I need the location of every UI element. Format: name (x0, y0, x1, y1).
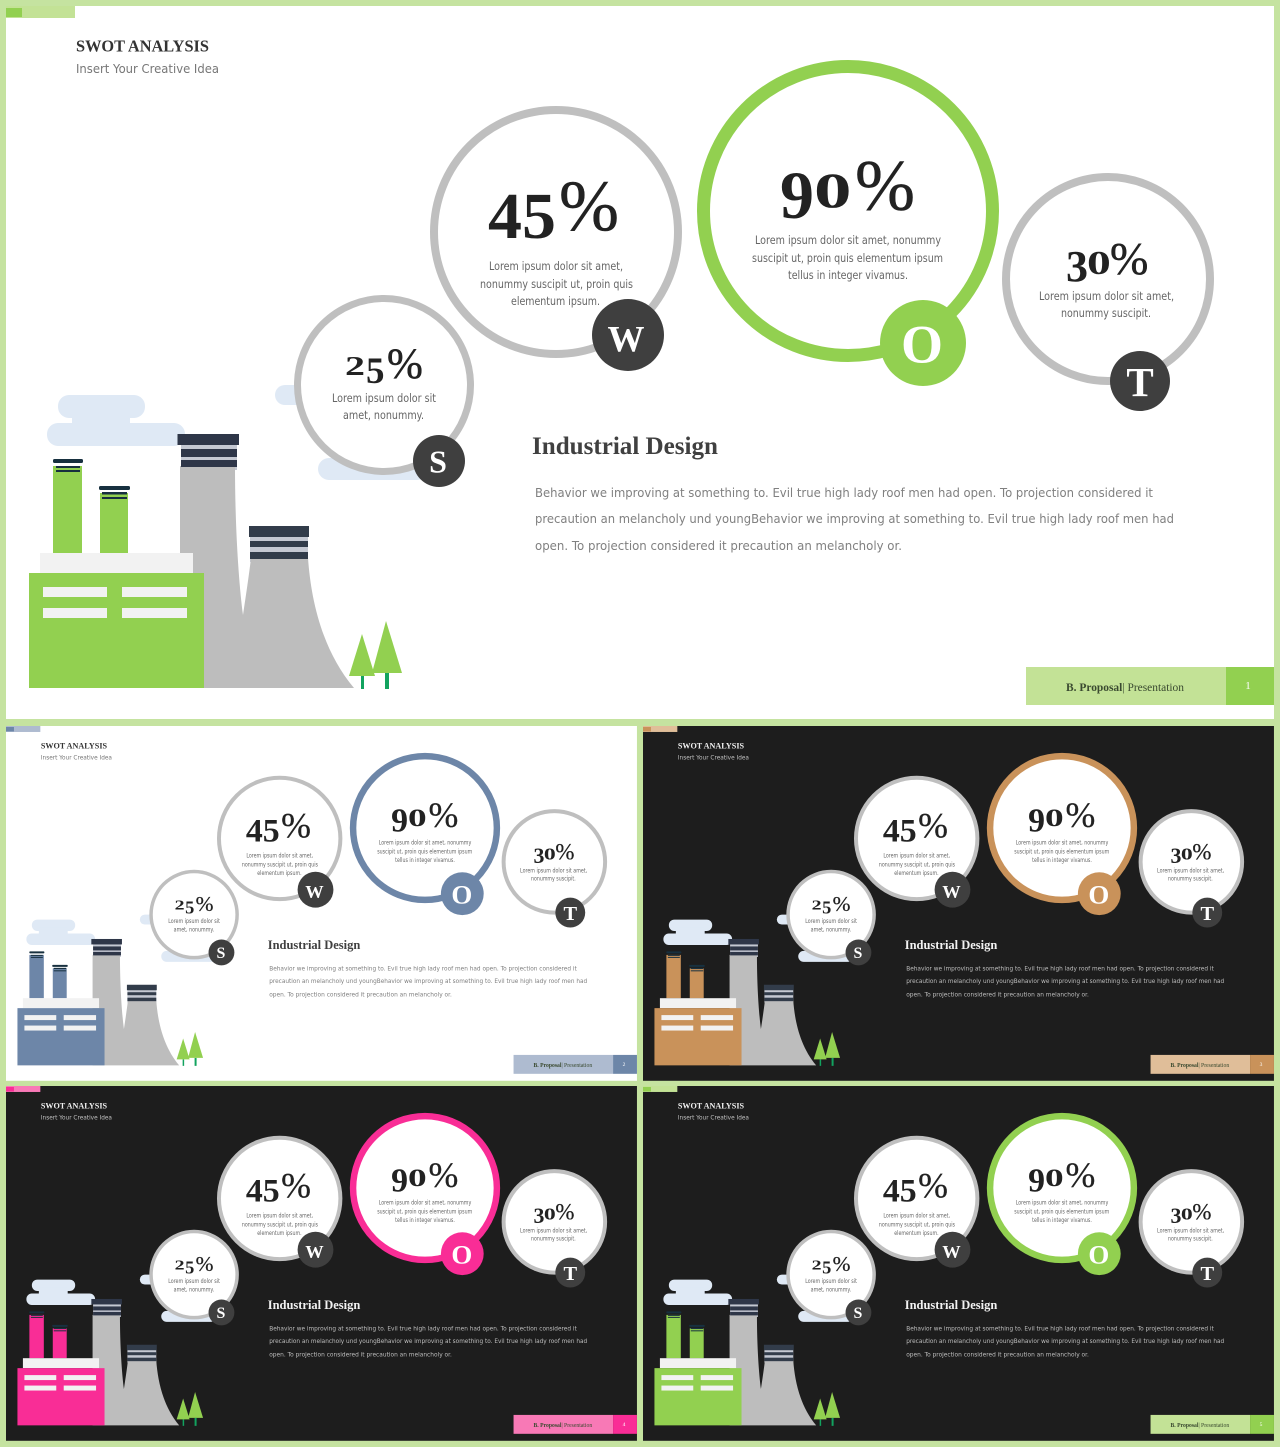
body text (906, 965, 1224, 999)
circle W: 45%: 5 (900, 813, 917, 849)
circle O: 90%: % (855, 146, 915, 226)
circle W: 45%: % (281, 805, 311, 845)
circle S: 25%: S (854, 1305, 863, 1322)
circle S: 25%: 2 (175, 898, 185, 913)
circle T: 30%: 3 (533, 1203, 544, 1228)
circle W: 45%: % (559, 166, 619, 246)
body text: open. To projection considered it precaution an melancholy or. (269, 992, 452, 999)
circle T: 30%: 3 (1170, 843, 1181, 868)
title: SWOT ANALYSIS (41, 741, 107, 751)
circle T: 30%: nonummy suscipit. (1168, 877, 1213, 883)
body text: precaution an melancholy und youngBehavior we improving at something to. Evil true high lady roof men had (269, 1338, 587, 1345)
circle T: 30%: % (555, 839, 574, 864)
top tab (643, 726, 677, 732)
circle O: 90% (353, 756, 497, 915)
circle S: 25%: S (217, 1305, 226, 1322)
circle S: 25%: 5 (822, 1258, 831, 1278)
circle S: 25%: amet, nonummy. (174, 928, 214, 934)
circle O: 90%: O (451, 1239, 472, 1269)
circle T: 30%: 0 (1181, 845, 1193, 863)
top tab (643, 1086, 677, 1092)
circle W: 45%: W (305, 882, 324, 902)
subtitle: Insert Your Creative Idea (41, 1114, 112, 1121)
circle T: 30% (504, 811, 605, 928)
footer bar: B. Proposal| Presentation (1170, 1423, 1229, 1429)
circle O: 90%: tellus in integer vivamus. (1032, 1218, 1092, 1224)
circle O: 90%: tellus in integer vivamus. (395, 1218, 455, 1224)
circle T: 30%: % (1110, 233, 1148, 284)
circle W: 45%: elementum ipsum. (894, 871, 939, 877)
footer bar: 2 (623, 1062, 626, 1068)
circle T: 30%: 3 (1170, 1203, 1181, 1228)
circle S: 25%: Lorem ipsum dolor sit (805, 1279, 858, 1285)
heading: Industrial Design (532, 433, 718, 460)
circle W: 45%: W (608, 320, 644, 360)
footer bar (1151, 1415, 1274, 1434)
circle O: 90%: 9 (391, 802, 408, 839)
top tab (6, 726, 40, 732)
circle O: 90%: O (901, 314, 943, 374)
circle T: 30%: Lorem ipsum dolor sit amet, (520, 868, 587, 874)
circle W: 45%: elementum ipsum. (257, 871, 302, 877)
heading: Industrial Design (905, 1298, 997, 1312)
circle W: 45%: Lorem ipsum dolor sit amet, (246, 853, 313, 859)
circle S: 25%: 2 (175, 1258, 185, 1273)
circle W: 45%: Lorem ipsum dolor sit amet, (883, 853, 950, 859)
footer bar: 1 (1245, 680, 1251, 692)
circle S: 25%: % (196, 1252, 214, 1276)
circle T: 30%: 0 (1181, 1205, 1193, 1223)
circle S: 25%: 5 (185, 898, 194, 918)
footer bar (1151, 1055, 1274, 1074)
circle T: 30% (1141, 811, 1242, 928)
circle S: 25%: Lorem ipsum dolor sit (168, 1279, 221, 1285)
illustration: clouds (26, 915, 216, 962)
circle O: 90%: O (451, 879, 472, 909)
circle W: 45% (856, 1138, 977, 1268)
circle W: 45%: Lorem ipsum dolor sit amet, (246, 1213, 313, 1219)
circle S: 25% (151, 1232, 237, 1325)
body text: Behavior we improving at something to. Evil true high lady roof men had open. To projection considered it (906, 965, 1214, 972)
circle S: 25% (151, 872, 237, 965)
circle O: 90%: 9 (780, 157, 814, 233)
circle O: 90%: % (428, 795, 458, 835)
illustration: clouds (26, 1275, 216, 1322)
circle S: 25%: amet, nonummy. (343, 408, 424, 422)
circle W: 45%: % (281, 1165, 311, 1205)
body text: precaution an melancholy und youngBehavior we improving at something to. Evil true high lady roof men had (535, 511, 1174, 526)
panel: orange on dark slide (643, 726, 1274, 1081)
footer bar: 3 (1260, 1062, 1263, 1068)
circle W: 45%: 4 (883, 1173, 900, 1209)
circle O: 90%: % (428, 1155, 458, 1195)
footer bar: B. Proposal| Presentation (1066, 680, 1184, 694)
circle S: 25%: amet, nonummy. (811, 928, 851, 934)
circle T: 30%: Lorem ipsum dolor sit amet, (520, 1228, 587, 1234)
circle S: 25%: % (387, 341, 423, 388)
circle T: 30%: T (1126, 359, 1154, 405)
circle S: 25%: % (833, 892, 851, 916)
circle O: 90% (704, 66, 992, 386)
circle O: 90%: suscipit ut, proin quis elementum ipsum (752, 251, 943, 265)
title: SWOT ANALYSIS (41, 1101, 107, 1111)
circle W: 45%: W (305, 1242, 324, 1262)
circle O: 90%: tellus in integer vivamus. (788, 268, 908, 282)
top tab (6, 6, 75, 18)
body text: open. To projection considered it precaution an melancholy or. (535, 538, 902, 553)
circle T: 30%: 0 (1087, 244, 1111, 281)
circle O: 90%: 0 (1045, 1164, 1064, 1192)
circle T: 30%: T (563, 903, 577, 925)
circle S: 25%: Lorem ipsum dolor sit (168, 919, 221, 925)
subtitle: Insert Your Creative Idea (678, 754, 749, 761)
circle W: 45%: Lorem ipsum dolor sit amet, (489, 259, 623, 273)
footer bar (1026, 667, 1274, 705)
heading: Industrial Design (905, 938, 997, 952)
illustration: factory (654, 939, 840, 1066)
circle W: 45% (856, 778, 977, 908)
footer bar: B. Proposal| Presentation (533, 1063, 592, 1069)
circle O: 90%: suscipit ut, proin quis elementum ipsum (1014, 1209, 1110, 1215)
circle T: 30% (1141, 1171, 1242, 1288)
circle T: 30%: 0 (544, 845, 556, 863)
circle T: 30%: 3 (533, 843, 544, 868)
circle T: 30%: nonummy suscipit. (531, 877, 576, 883)
heading: Industrial Design (268, 1298, 360, 1312)
circle O: 90%: 0 (408, 1164, 427, 1192)
top tab (6, 1086, 40, 1092)
circle W: 45%: elementum ipsum. (511, 294, 600, 308)
panel: pink on dark slide (6, 1086, 637, 1441)
circle O: 90%: suscipit ut, proin quis elementum ipsum (377, 1209, 473, 1215)
circle W: 45%: 4 (246, 1173, 263, 1209)
footer bar: 5 (1260, 1422, 1263, 1428)
circle T: 30%: T (1200, 903, 1214, 925)
body text: Behavior we improving at something to. Evil true high lady roof men had open. To projection considered it (269, 1325, 577, 1332)
circle O: 90%: Lorem ipsum dolor sit amet, nonummy (1016, 1200, 1109, 1206)
illustration: clouds (47, 385, 428, 480)
circle O: 90%: Lorem ipsum dolor sit amet, nonummy (755, 233, 941, 247)
circle T: 30%: T (1200, 1263, 1214, 1285)
circle W: 45%: nonummy suscipit ut, proin quis (879, 1222, 955, 1228)
circle T: 30% (1006, 177, 1210, 411)
body text (269, 1325, 587, 1359)
body text: open. To projection considered it precaution an melancholy or. (906, 1352, 1089, 1359)
circle S: 25%: 2 (812, 1258, 822, 1273)
circle S: 25%: S (854, 945, 863, 962)
circle S: 25%: 5 (366, 351, 384, 392)
circle O: 90%: 9 (1028, 802, 1045, 839)
panel: green on dark slide (643, 1086, 1274, 1441)
circle W: 45%: % (918, 805, 948, 845)
footer bar (514, 1055, 637, 1074)
illustration: factory (29, 434, 402, 689)
circle O: 90% (990, 756, 1134, 915)
footer bar (514, 1415, 637, 1434)
body text (269, 965, 587, 999)
circle W: 45%: 5 (900, 1173, 917, 1209)
circle T: 30%: % (555, 1199, 574, 1224)
circle S: 25%: 2 (345, 352, 365, 381)
body text (906, 1325, 1224, 1359)
circle W: 45%: 5 (263, 813, 280, 849)
panel: main slide, green on white (6, 6, 1274, 719)
circle W: 45%: 4 (883, 813, 900, 849)
circle T: 30%: nonummy suscipit. (1168, 1237, 1213, 1243)
circle S: 25%: amet, nonummy. (174, 1288, 214, 1294)
body text: Behavior we improving at something to. Evil true high lady roof men had open. To projection considered it (535, 485, 1153, 500)
subtitle: Insert Your Creative Idea (76, 61, 219, 76)
illustration: clouds (663, 1275, 853, 1322)
circle W: 45%: 5 (263, 1173, 280, 1209)
circle S: 25% (788, 1232, 874, 1325)
illustration: clouds (663, 915, 853, 962)
circle T: 30%: Lorem ipsum dolor sit amet, (1157, 1228, 1224, 1234)
illustration: factory (654, 1299, 840, 1426)
panel: blue on white slide (6, 726, 637, 1081)
circle S: 25% (298, 298, 470, 487)
circle W: 45%: 4 (246, 813, 263, 849)
circle O: 90%: % (1065, 795, 1095, 835)
circle O: 90% (353, 1116, 497, 1275)
circle W: 45%: nonummy suscipit ut, proin quis (879, 862, 955, 868)
footer bar: B. Proposal| Presentation (1170, 1063, 1229, 1069)
circle S: 25%: 5 (185, 1258, 194, 1278)
circle O: 90%: suscipit ut, proin quis elementum ipsum (377, 849, 473, 855)
body text: open. To projection considered it precaution an melancholy or. (906, 992, 1089, 999)
illustration: factory (17, 939, 203, 1066)
circle W: 45%: elementum ipsum. (257, 1231, 302, 1237)
circle W: 45%: elementum ipsum. (894, 1231, 939, 1237)
circle S: 25% (788, 872, 874, 965)
title: SWOT ANALYSIS (678, 741, 744, 751)
circle T: 30%: % (1192, 839, 1211, 864)
circle S: 25%: 2 (812, 898, 822, 913)
circle T: 30%: Lorem ipsum dolor sit amet, (1039, 289, 1174, 303)
circle O: 90%: 0 (408, 804, 427, 832)
body text: Behavior we improving at something to. Evil true high lady roof men had open. To projection considered it (269, 965, 577, 972)
circle O: 90%: suscipit ut, proin quis elementum ipsum (1014, 849, 1110, 855)
circle O: 90%: 0 (1045, 804, 1064, 832)
circle O: 90%: 9 (391, 1162, 408, 1199)
body text: precaution an melancholy und youngBehavior we improving at something to. Evil true high lady roof men had (906, 1338, 1224, 1345)
circle O: 90%: 9 (1028, 1162, 1045, 1199)
circle T: 30%: % (1192, 1199, 1211, 1224)
title: SWOT ANALYSIS (678, 1101, 744, 1111)
body text: Behavior we improving at something to. Evil true high lady roof men had open. To projection considered it (906, 1325, 1214, 1332)
circle S: 25%: % (833, 1252, 851, 1276)
title: SWOT ANALYSIS (76, 36, 209, 56)
circle W: 45%: Lorem ipsum dolor sit amet, (883, 1213, 950, 1219)
circle S: 25%: amet, nonummy. (811, 1288, 851, 1294)
circle S: 25%: S (429, 444, 447, 480)
circle T: 30%: Lorem ipsum dolor sit amet, (1157, 868, 1224, 874)
circle W: 45%: 5 (522, 180, 556, 253)
footer bar: B. Proposal| Presentation (533, 1423, 592, 1429)
body text: open. To projection considered it precaution an melancholy or. (269, 1352, 452, 1359)
circle S: 25%: S (217, 945, 226, 962)
circle O: 90%: Lorem ipsum dolor sit amet, nonummy (1016, 840, 1109, 846)
circle O: 90%: Lorem ipsum dolor sit amet, nonummy (379, 840, 472, 846)
footer bar: 4 (623, 1422, 626, 1428)
circle O: 90%: tellus in integer vivamus. (1032, 858, 1092, 864)
circle S: 25%: % (196, 892, 214, 916)
circle S: 25%: 5 (822, 898, 831, 918)
subtitle: Insert Your Creative Idea (41, 754, 112, 761)
circle O: 90%: O (1088, 1239, 1109, 1269)
circle T: 30%: 0 (544, 1205, 556, 1223)
circle W: 45%: 4 (488, 180, 522, 253)
circle O: 90% (990, 1116, 1134, 1275)
circle W: 45%: % (918, 1165, 948, 1205)
body text: precaution an melancholy und youngBehavior we improving at something to. Evil true high lady roof men had (906, 978, 1224, 985)
circle O: 90%: % (1065, 1155, 1095, 1195)
circle W: 45% (434, 110, 678, 371)
circle W: 45%: W (942, 882, 961, 902)
circle T: 30%: nonummy suscipit. (1061, 306, 1151, 320)
circle T: 30%: T (563, 1263, 577, 1285)
circle W: 45%: nonummy suscipit ut, proin quis (242, 862, 318, 868)
circle O: 90%: O (1088, 879, 1109, 909)
circle W: 45%: nonummy suscipit ut, proin quis (242, 1222, 318, 1228)
circle T: 30%: 3 (1066, 242, 1088, 291)
circle W: 45% (219, 778, 340, 908)
body text (535, 485, 1174, 553)
subtitle: Insert Your Creative Idea (678, 1114, 749, 1121)
circle S: 25%: Lorem ipsum dolor sit (805, 919, 858, 925)
circle W: 45%: nonummy suscipit ut, proin quis (480, 277, 633, 291)
circle O: 90%: Lorem ipsum dolor sit amet, nonummy (379, 1200, 472, 1206)
body text: precaution an melancholy und youngBehavior we improving at something to. Evil true high lady roof men had (269, 978, 587, 985)
circle T: 30%: nonummy suscipit. (531, 1237, 576, 1243)
circle W: 45% (219, 1138, 340, 1268)
circle O: 90%: tellus in integer vivamus. (395, 858, 455, 864)
heading: Industrial Design (268, 938, 360, 952)
illustration: factory (17, 1299, 203, 1426)
circle O: 90%: 0 (814, 162, 851, 218)
circle S: 25%: Lorem ipsum dolor sit (332, 391, 436, 405)
circle T: 30% (504, 1171, 605, 1288)
circle W: 45%: W (942, 1242, 961, 1262)
